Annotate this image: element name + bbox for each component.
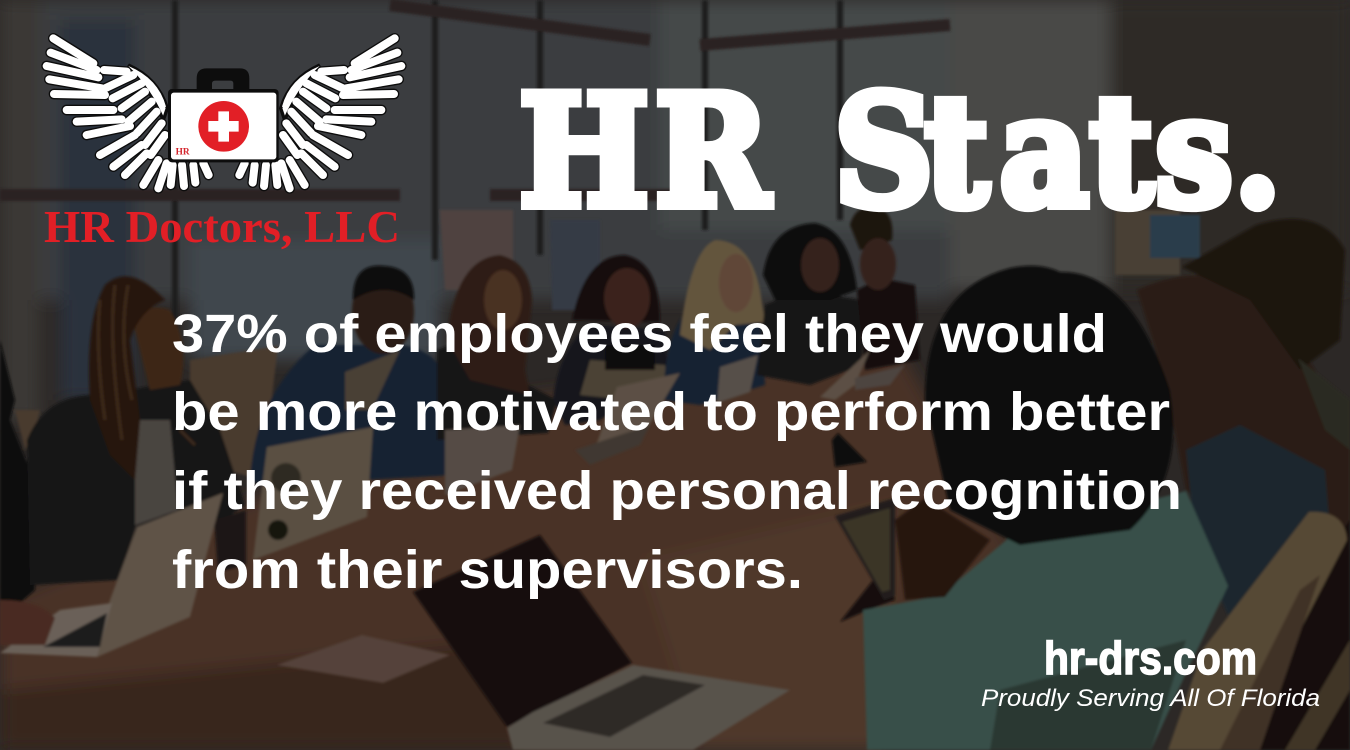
icon: right wing <box>239 38 401 188</box>
person: man <box>250 345 455 500</box>
statistic text block: 37% of employees feel they would <box>172 304 1107 364</box>
cup <box>214 510 246 572</box>
hand <box>0 600 55 645</box>
person: blonde woman <box>663 308 765 405</box>
website url: hr-drs.com <box>1044 632 1257 684</box>
person: curly hair woman <box>757 290 862 385</box>
tablet <box>840 565 895 622</box>
logo wordmark: HR Doctors, LLC <box>44 201 400 252</box>
speaker <box>832 433 867 467</box>
statistic text block <box>172 304 1182 600</box>
dark right side <box>1240 520 1350 750</box>
dark laptop screen <box>413 535 632 727</box>
person: front right <box>863 491 1228 750</box>
person: right long hair <box>1137 275 1350 620</box>
laptops far <box>717 355 758 403</box>
laptop: POCIT <box>97 493 223 657</box>
statistic text block: if they received personal recognition <box>172 461 1182 521</box>
icon: left wing <box>47 38 209 188</box>
case label: HR <box>176 148 190 158</box>
logo emblem <box>47 38 401 188</box>
person: woman left <box>27 380 245 585</box>
icon: case handle <box>197 68 249 92</box>
icon: medical case <box>168 89 279 162</box>
laptop: stickers <box>253 427 373 560</box>
icon: red cross circle <box>198 101 249 152</box>
person: far woman <box>857 278 920 370</box>
chair <box>190 346 278 480</box>
statistic text block: from their supervisors. <box>172 540 803 600</box>
person: far left <box>0 340 35 610</box>
chair right <box>1168 512 1347 750</box>
person: woman with glasses <box>437 345 557 440</box>
wall posters <box>440 210 513 290</box>
logo: HR Doctors winged medical case <box>44 38 401 252</box>
dark laptop base <box>507 665 790 750</box>
person: right top <box>1182 219 1345 370</box>
tagline: Proudly Serving All Of Florida <box>981 685 1320 712</box>
title: HR Stats. <box>519 62 1282 242</box>
statistic text block: be more motivated to perform better <box>172 382 1170 442</box>
person: woman centre <box>553 325 668 425</box>
window frames <box>175 0 840 330</box>
paper <box>277 635 450 683</box>
